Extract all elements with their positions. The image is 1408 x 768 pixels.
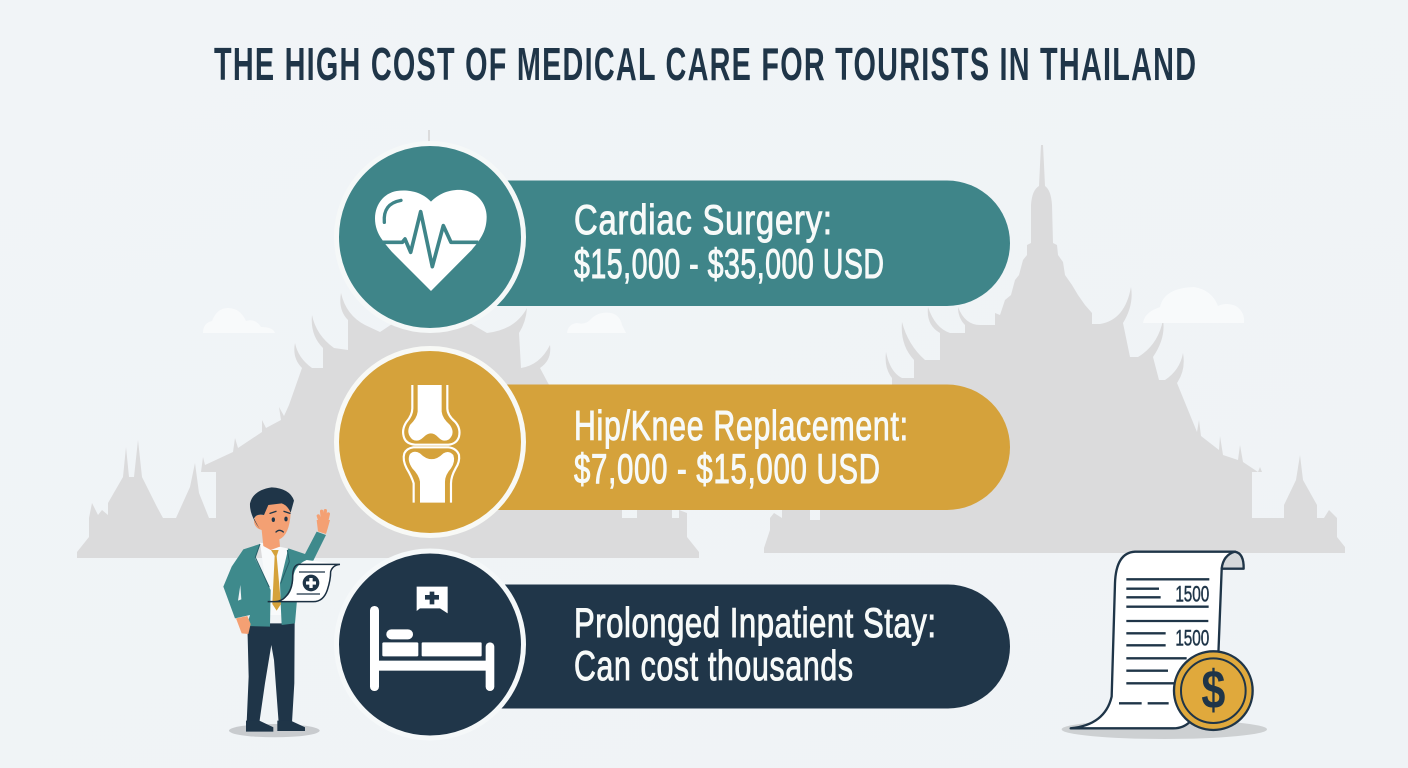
- panel: prolonged inpatient stay: [336, 551, 1010, 738]
- hair: [250, 487, 294, 529]
- receipt amounts: 1500: [1175, 581, 1209, 606]
- circle: cardiac surgery: [336, 144, 524, 330]
- hand on hip: [236, 616, 251, 634]
- pill: hip and knee: [400, 384, 1010, 510]
- panel: hip and knee replacement: [336, 348, 1010, 536]
- illustration: receipt with coin: [1062, 552, 1267, 739]
- receipt paper: [1071, 552, 1235, 728]
- neck and face: [254, 502, 291, 550]
- ground shadow: [1062, 720, 1267, 739]
- text: hip and knee cost: $7,000 - $15,000 USD: [574, 445, 880, 492]
- cloud middle: [567, 313, 626, 333]
- icon: hospital bed: [370, 587, 494, 691]
- text: hip and knee cost: [574, 402, 908, 492]
- text: hip and knee cost: Hip/Knee Replacement:: [574, 402, 908, 449]
- receipt lines: [1119, 579, 1209, 703]
- receipt curl: [1222, 552, 1244, 569]
- cloud right: [1143, 287, 1244, 323]
- illustration: receipt with coin: 1500: [1175, 625, 1209, 650]
- cloud left: [203, 308, 275, 333]
- pill: inpatient stay: [400, 584, 1010, 708]
- coin: [1174, 651, 1253, 730]
- circle: hip and knee: [336, 348, 524, 536]
- text: inpatient stay cost: [574, 599, 936, 689]
- panel: cardiac surgery: [336, 144, 1010, 330]
- raised hand: [317, 511, 330, 534]
- pill: cardiac surgery: [400, 180, 1010, 306]
- trousers: [247, 623, 295, 723]
- text: cardiac surgery cost: [574, 196, 884, 287]
- text: cardiac surgery cost: $15,000 - $35,000 USD: [574, 239, 884, 287]
- icon: knee joint: [403, 385, 459, 503]
- illustration: receipt with coin: $: [1201, 659, 1225, 721]
- icon: heart with pulse: [375, 190, 487, 291]
- title: THE HIGH COST OF MEDICAL CARE FOR TOURISTS IN THAILAND: [214, 39, 1196, 91]
- right temple silhouette: [764, 145, 1345, 553]
- text: inpatient stay cost: Can cost thousands: [574, 642, 853, 689]
- ground shadow: [229, 724, 320, 737]
- text: inpatient stay cost: Prolonged Inpatient Stay:: [574, 599, 936, 646]
- jacket: [223, 532, 326, 627]
- illustration: worried tourist holding medical bill: [223, 487, 340, 737]
- shirt: [260, 543, 290, 615]
- text: cardiac surgery cost: Cardiac Surgery:: [574, 196, 832, 243]
- circle: inpatient stay: [336, 551, 524, 738]
- tie: [271, 550, 281, 611]
- left temple silhouette: [77, 130, 699, 558]
- face features: [270, 511, 290, 532]
- medical document: [268, 560, 340, 602]
- shoes: [246, 721, 305, 732]
